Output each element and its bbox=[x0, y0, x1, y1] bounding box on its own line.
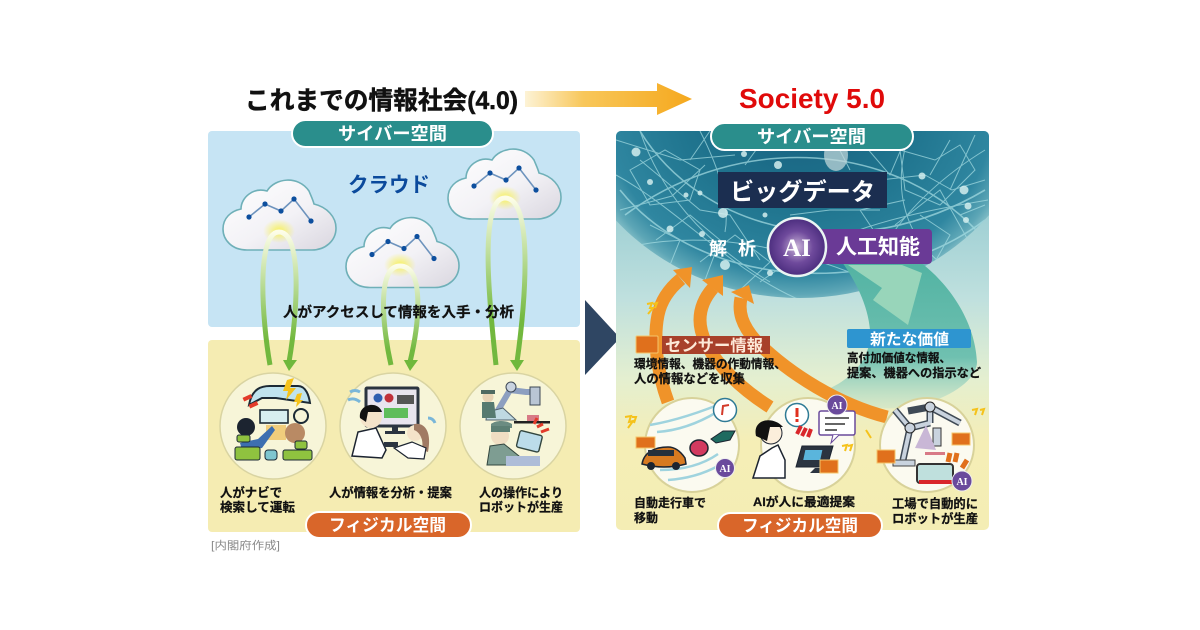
caption: self-driving: 自動走行車で bbox=[634, 495, 706, 510]
sensor information block: 人の情報などを収集 bbox=[634, 371, 745, 386]
pill: right サイバー空間 bbox=[711, 123, 913, 150]
panel: left physical space background bbox=[208, 340, 580, 532]
cloud 2 bbox=[346, 218, 459, 288]
caption: automated factory: ロボットが生産 bbox=[892, 511, 978, 526]
illustration: operating a robot bbox=[460, 373, 566, 479]
clouds bbox=[223, 149, 561, 288]
panel: left cyber space background bbox=[208, 131, 580, 327]
caption 1 bbox=[220, 485, 295, 514]
badge: AI: AI bbox=[783, 235, 811, 262]
illustration: self-driving cars bbox=[625, 398, 739, 492]
badge: AI bbox=[768, 218, 826, 276]
caption: automated factory: 工場で自動的に bbox=[892, 496, 978, 511]
green access arrows bbox=[263, 186, 525, 371]
illustration: AI proposal to a person: AI bbox=[831, 401, 843, 412]
pill: left フィジカル空間: フィジカル空間 bbox=[329, 516, 446, 535]
teal arrow: new value flows down bbox=[826, 262, 977, 408]
caption: AI proposal: AIが人に最適提案 bbox=[753, 494, 855, 509]
caption: automated factory bbox=[892, 496, 978, 526]
title: Society 5.0: Society 5.0 bbox=[739, 83, 885, 114]
arrow pair 3 bbox=[488, 186, 525, 371]
arrow: transition to Society 5.0 bbox=[525, 83, 692, 115]
caption: self-driving: 移動 bbox=[634, 510, 658, 525]
caption: self-driving bbox=[634, 495, 706, 525]
caption 3: 人の操作により bbox=[479, 485, 563, 500]
illustration: driver with navigation bbox=[220, 373, 326, 479]
big data label: ビッグデータ bbox=[730, 178, 875, 206]
cloud 1 bbox=[223, 180, 336, 250]
illustration: AI proposal to a person bbox=[753, 395, 855, 492]
caption 1: 検索して運転 bbox=[220, 500, 295, 514]
new value block: 高付加価値な情報、 bbox=[847, 351, 951, 365]
illustration: analysing information at a monitor bbox=[340, 373, 446, 479]
illustration: factory robot bbox=[866, 398, 984, 492]
orange arrow 3 bbox=[731, 285, 887, 417]
illustration: self-driving cars: AI bbox=[719, 464, 731, 475]
illustration: factory robot: AI bbox=[956, 477, 968, 488]
label: 人がアクセスして情報を入手・分析: 人がアクセスして情報を入手・分析 bbox=[283, 303, 514, 321]
title: これまでの情報社会(4.0): これまでの情報社会(4.0) bbox=[245, 87, 518, 115]
arrow pair 2 bbox=[383, 253, 418, 371]
sensor information block: センサー情報 bbox=[665, 336, 763, 355]
captions: right physical space bbox=[634, 494, 978, 526]
new value block: 新たな価値 bbox=[870, 330, 949, 348]
orange arrows: sensor data rising to AI bbox=[656, 267, 887, 417]
sensor information block: 環境情報、機器の作動情報、 bbox=[634, 357, 786, 371]
pill: left サイバー空間 bbox=[292, 120, 493, 147]
pill: right フィジカル空間: フィジカル空間 bbox=[742, 516, 858, 536]
captions: left physical space bbox=[220, 485, 563, 514]
source note: 内閣府作成: [内閣府作成] bbox=[211, 538, 280, 552]
panel: right cyber and physical background bbox=[616, 131, 989, 530]
caption 3 bbox=[479, 485, 563, 514]
label: 解析: 解 析 bbox=[709, 239, 756, 259]
new value block bbox=[847, 329, 981, 380]
big data label bbox=[718, 172, 887, 208]
cloud 3 bbox=[448, 149, 561, 219]
chevron between panels bbox=[585, 300, 620, 375]
label: 人工知能 bbox=[818, 229, 932, 264]
caption 2: 人が情報を分析・提案 bbox=[329, 485, 453, 500]
new value block: 提案、機器への指示など bbox=[847, 365, 981, 380]
icon: sensor lightning bbox=[647, 303, 657, 314]
orange arrow 2 bbox=[700, 275, 770, 407]
pill: right サイバー空間: サイバー空間 bbox=[757, 127, 866, 147]
orange arrow 1 bbox=[656, 267, 692, 402]
sensor information block bbox=[634, 336, 786, 386]
caption 1: 人がナビで bbox=[220, 485, 282, 500]
pill: left サイバー空間: サイバー空間 bbox=[338, 124, 447, 144]
heading: クラウド: クラウド bbox=[348, 174, 430, 197]
caption 3: ロボットが生産 bbox=[479, 500, 563, 514]
pill: left フィジカル空間 bbox=[306, 512, 471, 538]
pill: right フィジカル空間 bbox=[718, 513, 882, 538]
arrow pair 1 bbox=[263, 219, 297, 371]
label: 人工知能: 人工知能 bbox=[836, 236, 920, 259]
